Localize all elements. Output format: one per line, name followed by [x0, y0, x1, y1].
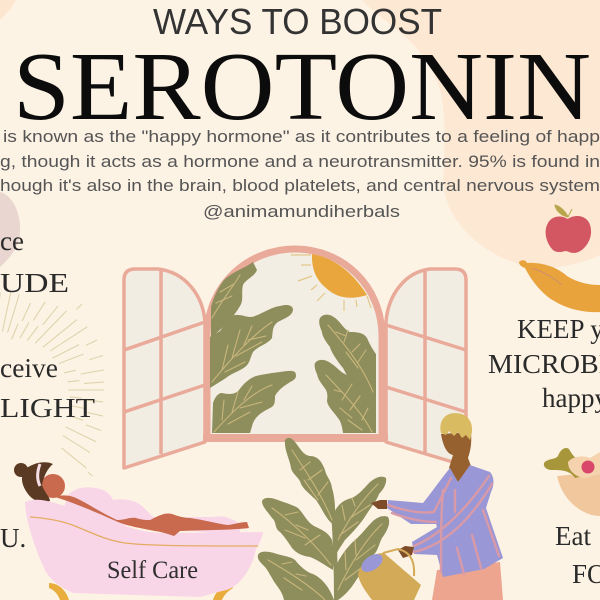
label word: UDE: UDE — [0, 268, 69, 298]
person hair — [440, 413, 472, 440]
intro line 3: hough it's also in the brain, blood platelets, and central nervous system — [0, 176, 600, 195]
window leaf middle left — [210, 305, 293, 388]
watering can — [358, 549, 421, 600]
icon: woman in bath — [14, 462, 263, 600]
window leaf lower right — [315, 360, 376, 433]
icon: food bowl — [544, 448, 600, 516]
person trousers — [432, 562, 503, 600]
centre arch window — [207, 249, 382, 438]
bath foam — [60, 487, 240, 535]
icon: sunlight rays — [0, 290, 104, 476]
bathtub — [25, 500, 263, 597]
right shutter — [386, 269, 466, 466]
window leaf upper left — [211, 262, 257, 338]
label: keep your microbiome happy — [488, 314, 600, 413]
label word: ce: ce — [0, 226, 24, 256]
left shutter — [124, 269, 205, 468]
window leaf upper right — [319, 315, 376, 398]
shirt stripes — [388, 476, 499, 574]
label: self care: Self Care — [107, 557, 198, 584]
background blob: top right — [362, 0, 600, 268]
label: practice gratitude — [0, 226, 69, 298]
plant stem — [333, 510, 336, 600]
icon: banana — [519, 260, 600, 312]
intro line 2: g, though it acts as a hormone and a neurotransmitter. 95% is found in — [0, 152, 600, 171]
icon: person watering plant — [358, 413, 503, 600]
icon: potted plant — [258, 438, 389, 600]
person shirt — [387, 465, 503, 577]
plant right leaf lower — [335, 516, 389, 600]
heading: ways to boost: WAYS TO BOOST — [153, 1, 442, 42]
background blob: top left — [0, 0, 16, 20]
sun — [291, 254, 371, 311]
credit handle: @animamundiherbals — [203, 202, 400, 221]
heading: serotonin: SEROTONIN — [13, 33, 591, 141]
intro line 1: is known as the "happy hormone" as it contributes to a feeling of happ — [3, 127, 600, 146]
plant top leaf — [285, 438, 335, 525]
bath feet — [49, 583, 233, 600]
bath gold trim — [30, 517, 258, 546]
woman body — [55, 495, 249, 536]
window illustration — [124, 249, 466, 468]
plant left leaf upper — [262, 498, 334, 570]
label: eat foods — [555, 521, 600, 589]
label: receive sunlight — [0, 353, 96, 423]
label: U.: U. — [0, 523, 26, 553]
intro text block — [0, 127, 600, 221]
icon: apple — [546, 205, 591, 253]
window sill — [203, 434, 388, 442]
plant right leaf upper — [332, 477, 386, 555]
background blob: left pink — [0, 192, 20, 267]
label word: LIGHT: LIGHT — [0, 393, 96, 423]
label word: eat: Eat — [555, 521, 591, 551]
label word: ceive: ceive — [0, 353, 58, 383]
person hands — [371, 500, 414, 558]
woman head and hair — [14, 462, 65, 502]
person neck and face — [441, 432, 471, 482]
plant left leaf lower — [258, 552, 334, 600]
window leaf lower left — [212, 371, 296, 433]
